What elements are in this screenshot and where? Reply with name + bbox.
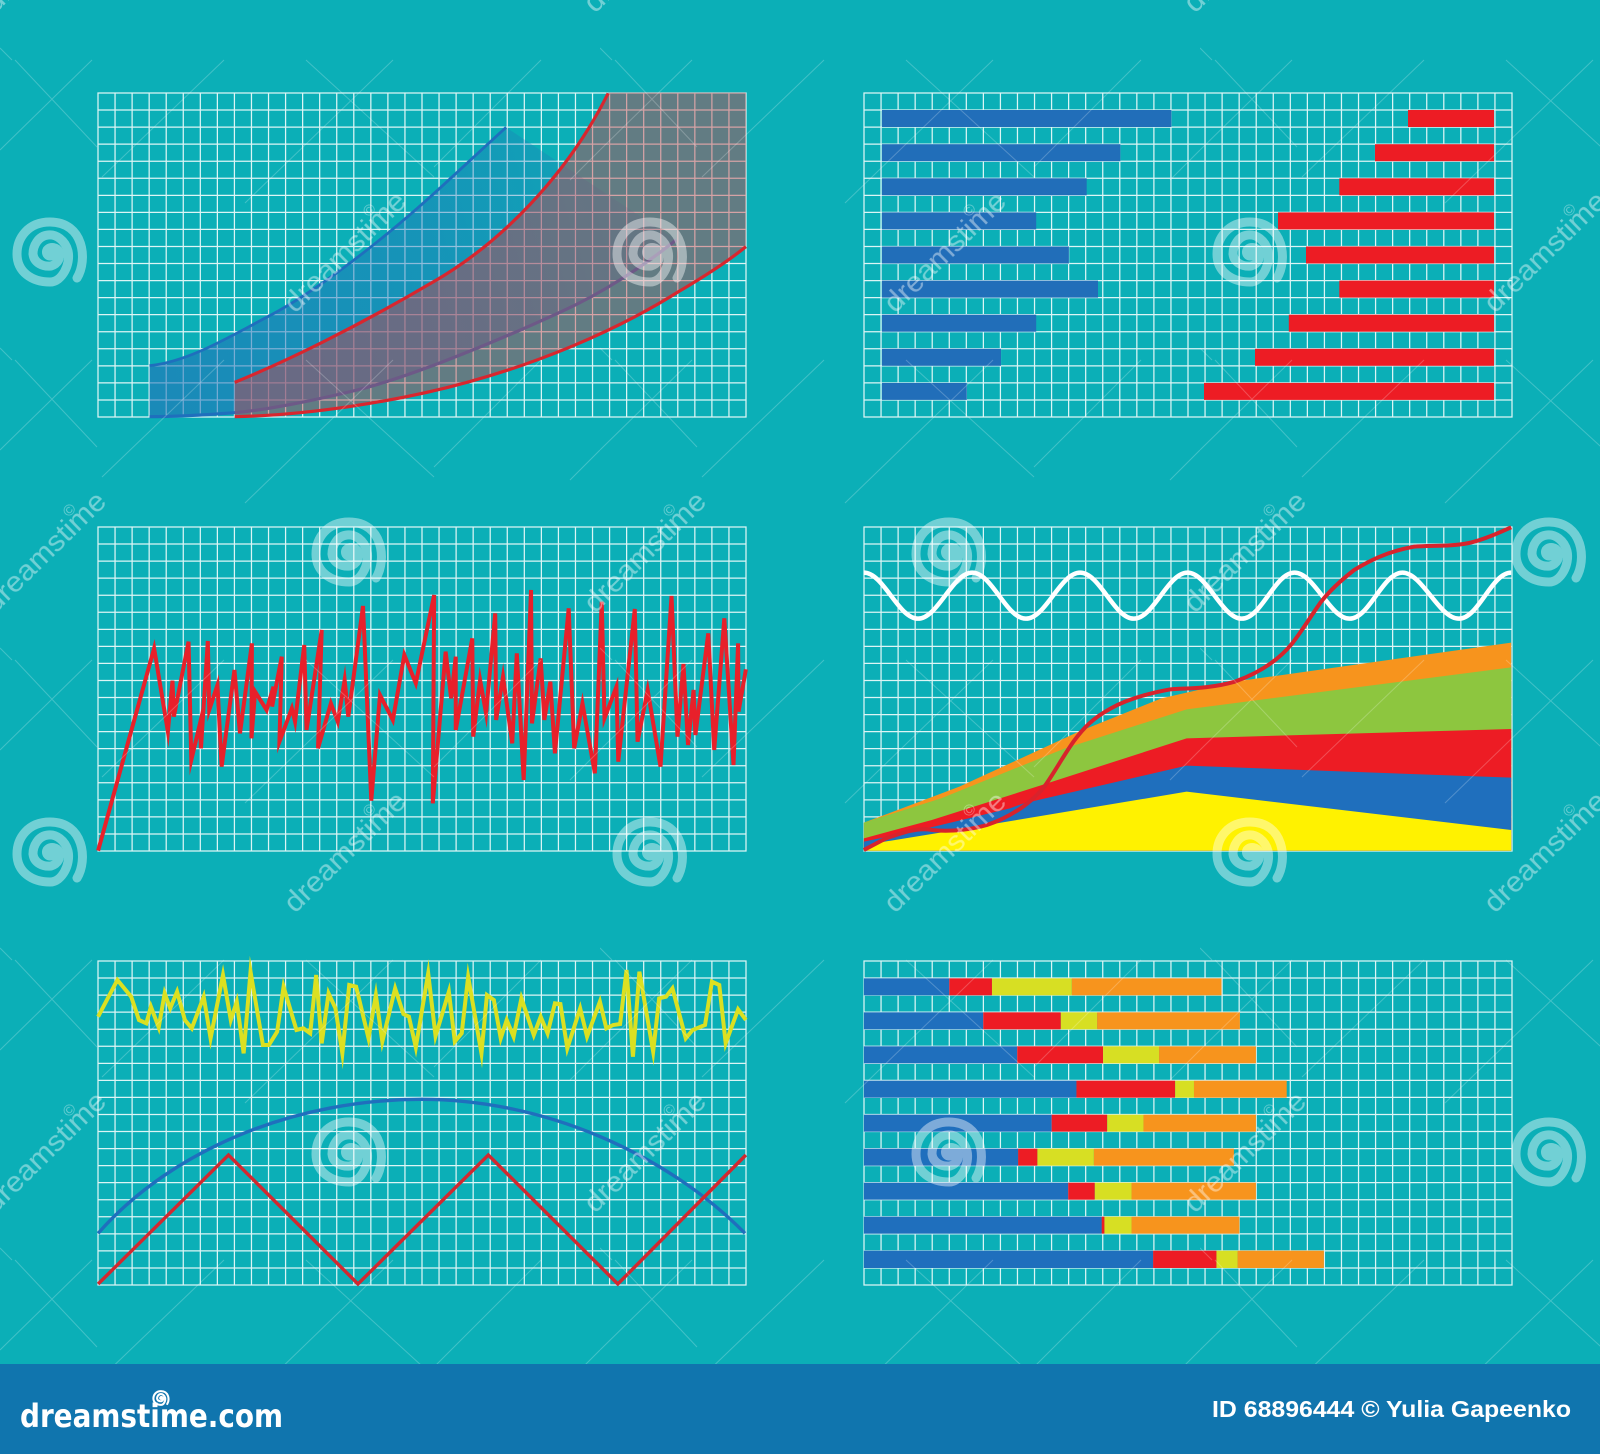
red jagged line xyxy=(98,590,746,851)
watermark: dreamstime text: © xyxy=(60,1100,80,1121)
watermark: dreamstime text: © xyxy=(1560,800,1580,821)
grid: signal panel xyxy=(98,961,746,1285)
red area xyxy=(864,729,1511,851)
red band fill xyxy=(235,93,746,417)
watermark: dreamstime text: © xyxy=(1260,1100,1280,1121)
red lower curve xyxy=(235,247,746,417)
watermark: dreamstime text: © xyxy=(360,200,380,221)
watermark: dreamstime text: © xyxy=(1260,500,1280,521)
footer background xyxy=(0,1364,1600,1454)
footer logo text: dreamstime.com xyxy=(20,1397,283,1435)
watermark: dreamstime text: © xyxy=(360,800,380,821)
orange segments xyxy=(1072,978,1324,1268)
grid: bars panel xyxy=(864,93,1512,417)
orange area xyxy=(864,643,1511,851)
panel: volatile red line chart xyxy=(98,527,746,851)
footer bar xyxy=(0,1364,1600,1454)
chart: curved bands xyxy=(149,93,746,417)
panel: signal lines chart xyxy=(98,961,746,1285)
blue band fill xyxy=(149,127,676,417)
signal lines xyxy=(98,970,746,1284)
yellow noisy line xyxy=(98,970,746,1057)
blue lower curve xyxy=(149,240,676,417)
watermark: spirals xyxy=(17,222,1581,1182)
watermark: dreamstime text: dreamstime xyxy=(877,190,1008,319)
panel: stacked area chart with curves xyxy=(864,527,1512,851)
yellow segments xyxy=(992,978,1238,1268)
icon: logo spiral xyxy=(153,1391,168,1405)
red upper curve xyxy=(235,93,608,382)
grid: stacked area panel xyxy=(864,527,1512,851)
stacked areas and lines xyxy=(864,527,1511,851)
watermark: dreamstime text: dreamstime xyxy=(577,1090,708,1219)
watermark: dreamstime text: © xyxy=(60,500,80,521)
watermark: dreamstime text: dreamstime xyxy=(877,790,1008,919)
blue area xyxy=(864,766,1511,851)
red growth curve xyxy=(864,527,1511,850)
grid: red line panel xyxy=(98,527,746,851)
blue bars growing from the left xyxy=(882,110,1171,400)
red triangle wave xyxy=(98,1155,746,1284)
watermark: dreamstime text: © xyxy=(660,1100,680,1121)
watermark: dreamstime text: dreamstime xyxy=(277,190,408,319)
watermark: dreamstime text: dreamstime xyxy=(1177,490,1308,619)
white sine wave xyxy=(864,573,1511,619)
panel: stacked horizontal bars xyxy=(864,961,1512,1285)
blue segments xyxy=(864,978,1153,1268)
panel: opposing horizontal bar chart xyxy=(864,93,1512,417)
red segments xyxy=(949,978,1216,1268)
watermark: dreamstime text: dreamstime xyxy=(277,790,408,919)
watermark: dreamstime text: dreamstime xyxy=(1177,1090,1308,1219)
yellow area xyxy=(864,792,1511,851)
blue upper curve xyxy=(149,127,506,366)
watermark: dreamstime text: © xyxy=(960,800,980,821)
blue arc xyxy=(98,1099,745,1233)
watermark: dreamstime text: © xyxy=(660,500,680,521)
stacked bar rows xyxy=(864,978,1324,1268)
panel: overlapping curves area chart xyxy=(98,93,746,417)
watermark: dreamstime text: dreamstime xyxy=(577,490,708,619)
grid: curves panel xyxy=(98,93,746,417)
grid: stacked bars panel xyxy=(864,961,1512,1285)
green area xyxy=(864,667,1511,851)
footer credit: ID 68896444 © Yulia Gapeenko xyxy=(1212,1396,1571,1422)
watermark: dreamstime text: © xyxy=(960,200,980,221)
watermark: dreamstime text: © xyxy=(1560,200,1580,221)
red bars growing from the right xyxy=(1204,110,1494,400)
